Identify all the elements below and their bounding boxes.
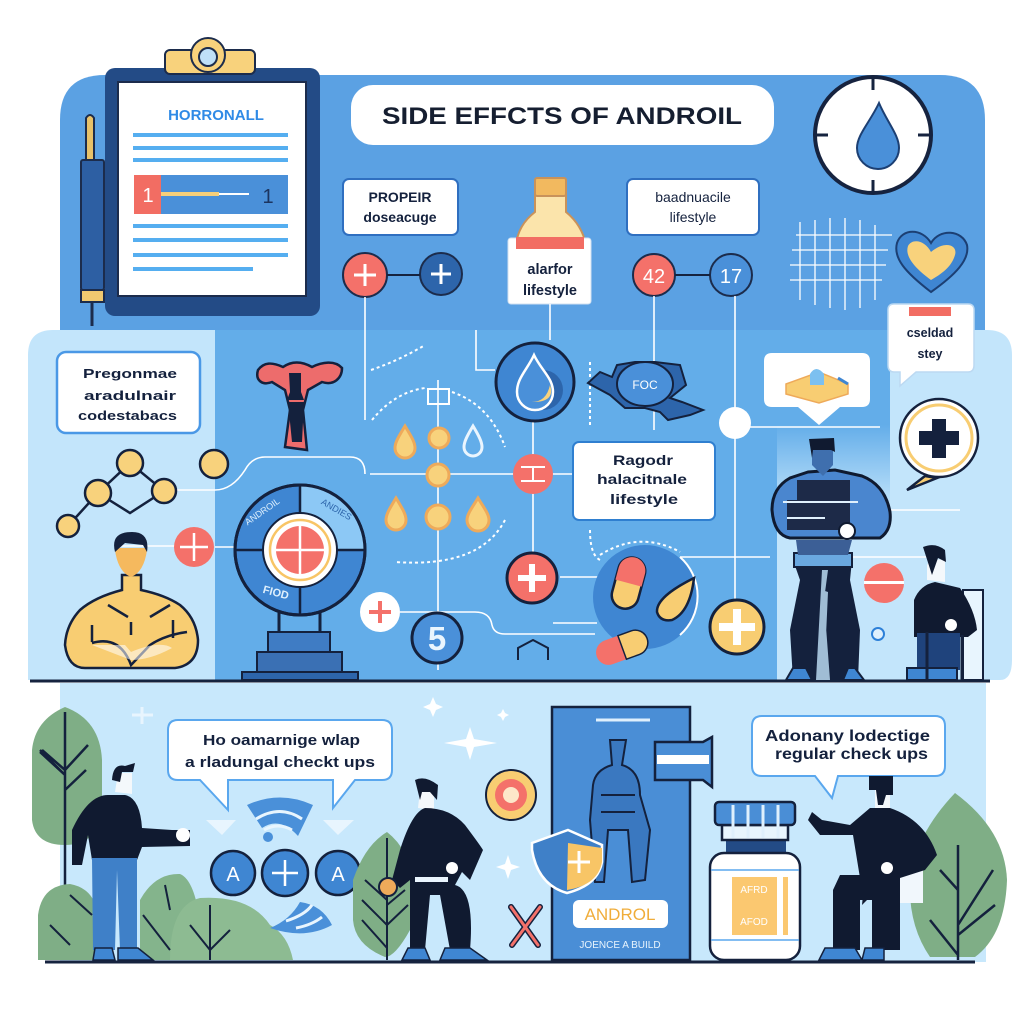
icon: uterus xyxy=(257,362,342,450)
number badges: 17 xyxy=(720,266,742,288)
clipboard gauge: 1 xyxy=(142,185,154,207)
number badges xyxy=(633,254,752,296)
grid graphic xyxy=(790,218,892,310)
label: programme: codestabacs xyxy=(78,408,177,423)
poster: androl: JOENCE A BUILD xyxy=(579,940,661,951)
clipboard document xyxy=(105,38,320,316)
label: lifestyle xyxy=(627,179,759,235)
poster: androl xyxy=(552,707,690,960)
connector lines xyxy=(120,296,960,670)
bushes left xyxy=(38,874,293,960)
small square node xyxy=(428,389,449,404)
faint plus xyxy=(132,707,153,724)
icon: water drop badge xyxy=(496,343,574,421)
figure: muscular man xyxy=(65,532,198,668)
icon: wifi xyxy=(247,798,313,842)
poster label xyxy=(573,900,668,928)
callout: regular check ups xyxy=(752,716,945,798)
jar bottle xyxy=(710,802,800,960)
tree centre xyxy=(353,832,410,960)
plus sign red xyxy=(174,527,214,567)
plus sign red large xyxy=(507,553,557,603)
target dial on pedestal: FIOD xyxy=(262,584,290,602)
callout: check ups: a rladungal checkt ups xyxy=(185,754,375,771)
callout: medical cross xyxy=(900,399,978,490)
panel: middle blue centre xyxy=(215,330,777,680)
dashed circle xyxy=(371,345,680,563)
label: programme: aradulnair xyxy=(84,388,176,403)
number five: 5 xyxy=(428,620,446,657)
clipboard gauge xyxy=(134,175,288,214)
target dial on pedestal: ANDROIL xyxy=(243,496,282,527)
callout: checklist: cseldad xyxy=(907,326,953,340)
number badges: 42 xyxy=(643,266,665,288)
label: lifestyle: baadnuacile xyxy=(655,189,731,205)
drop icons group xyxy=(386,426,489,531)
poster label: ANDROL xyxy=(585,905,655,924)
tree left xyxy=(32,707,102,885)
node circle xyxy=(719,407,751,439)
label: regular lifestyle: Ragodr xyxy=(613,452,674,468)
panel: bottom light band xyxy=(60,683,986,962)
bottle with label: alarfor xyxy=(527,262,573,278)
three circles xyxy=(211,850,360,896)
target dial on pedestal: ANDIES xyxy=(319,497,354,522)
figure: man standing centre xyxy=(379,778,487,960)
icon: gold box tooltip xyxy=(764,353,870,425)
icon: molecule xyxy=(57,450,228,537)
crossed tools xyxy=(511,907,540,945)
flag tag xyxy=(655,737,712,787)
icon: fog shape: FOC xyxy=(632,378,658,392)
plus sign square xyxy=(513,454,553,494)
label: regular lifestyle: lifestyle xyxy=(610,491,678,507)
label: regular lifestyle: halacitnale xyxy=(597,471,687,487)
figure: man pointing xyxy=(72,763,190,960)
label: proper dosage xyxy=(343,179,458,235)
icon: clock with water drop xyxy=(815,77,931,193)
callout: regular check ups: Adonany lodectige xyxy=(765,728,930,745)
label: proper dosage: doseacuge xyxy=(363,209,437,225)
label: regular lifestyle xyxy=(573,442,715,520)
pen xyxy=(81,115,104,326)
three circles: A xyxy=(226,864,240,886)
small circle xyxy=(872,628,884,640)
plus sign gold xyxy=(710,600,764,654)
panel: middle light band xyxy=(28,330,1012,680)
panel: middle blue fade xyxy=(777,330,890,540)
bottle with label: lifestyle xyxy=(523,283,577,299)
figure: standing muscular man xyxy=(772,438,890,680)
clipboard gauge: 1 xyxy=(262,186,274,208)
shield icon xyxy=(532,830,602,893)
jar bottle: AFOD xyxy=(740,917,768,928)
callout: checklist: stey xyxy=(917,347,943,361)
callout: regular check ups: regular check ups xyxy=(775,746,928,763)
target dial on pedestal xyxy=(235,485,365,680)
sparkle stars xyxy=(423,697,520,879)
callout: checklist xyxy=(888,304,974,386)
gold badge xyxy=(486,770,536,820)
label: programme: Pregonmae xyxy=(83,366,177,381)
callout: check ups xyxy=(168,720,392,810)
label: lifestyle: lifestyle xyxy=(670,209,717,225)
icon: fog shape xyxy=(588,362,703,420)
minus badge xyxy=(864,563,904,603)
icon: heart xyxy=(896,232,967,292)
clipboard heading: HORRONALL xyxy=(168,107,264,124)
title: SIDE EFFCTS OF ANDROIL xyxy=(382,103,742,130)
plus badges xyxy=(343,253,462,297)
callout: check ups: Ho oamarnige wlap xyxy=(203,732,360,749)
tree right xyxy=(910,793,1007,960)
arrows down xyxy=(206,820,354,835)
baseline rules xyxy=(30,681,990,962)
panel: top blue background xyxy=(60,75,985,330)
label: proper dosage: PROPEIR xyxy=(368,189,432,205)
jar bottle: AFRD xyxy=(740,885,768,896)
three circles: A xyxy=(331,864,345,886)
plus sign white xyxy=(360,592,400,632)
icon: wifi lower xyxy=(270,902,332,933)
house outline xyxy=(518,640,548,660)
number five xyxy=(412,613,462,663)
bottle with label xyxy=(508,178,591,304)
figure: seated man xyxy=(808,776,937,960)
pills xyxy=(593,545,698,668)
figure: seated person xyxy=(907,545,983,680)
label: programme xyxy=(57,352,200,433)
title xyxy=(351,85,774,145)
